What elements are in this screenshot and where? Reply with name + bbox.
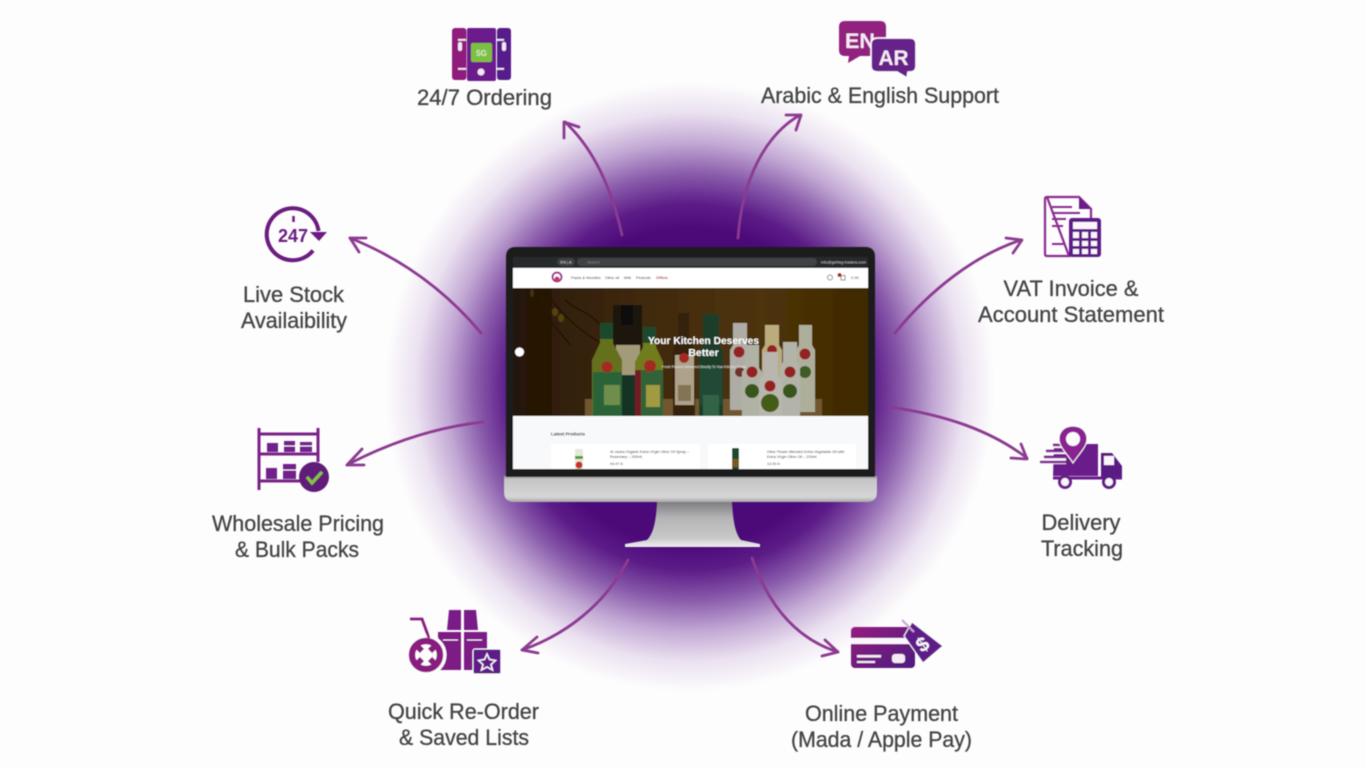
icon: delivery truck: [1040, 426, 1122, 488]
icon: language bubbles: AR: [878, 47, 908, 70]
icon: invoice and calculator: [1045, 197, 1101, 257]
feature: quick re-order: & Saved Lists: [399, 725, 529, 750]
icon: cart, boxes and star: [410, 610, 501, 674]
latest products: Olive Flower Blended Extra Vegetable Oil with: [767, 450, 844, 454]
arrow: to Arabic and English support: [738, 115, 801, 238]
site nav: Milk: [624, 275, 631, 280]
label: 24/7 Ordering: [417, 85, 552, 110]
browser top bar: [513, 257, 868, 268]
feature: wholesale pricing: [212, 428, 384, 562]
carousel dot: [515, 348, 524, 356]
latest products: 43.47 A: [610, 462, 623, 466]
site nav: Pasta & Noodles: [571, 275, 601, 280]
latest products: Latest Products: [551, 432, 586, 436]
monitor chin: [504, 476, 877, 502]
label: Live Stock: [243, 282, 345, 307]
arrow: to wholesale pricing: [347, 422, 483, 465]
hero headline: Fresh Flavors Delivered Directly To Your Kitchen Today: [662, 364, 746, 369]
icon: card and price tag: [851, 620, 943, 668]
latest products: Rosemary – 200ml: [610, 455, 642, 459]
arrow: to live stock: [350, 238, 481, 333]
site nav: 0.00: [851, 275, 860, 280]
icon: language bubbles: [839, 21, 916, 78]
feature: Arabic and English support: [761, 21, 999, 108]
site nav: Olive oil: [605, 275, 619, 280]
screen: [513, 268, 868, 474]
monitor: [504, 247, 877, 547]
latest products: Al Jazira Organic Extra Virgin Olive Oil Spray –: [610, 450, 690, 454]
arrow: to online payment: [752, 558, 838, 656]
feature: live stock: [241, 208, 347, 333]
label: Delivery: [1042, 510, 1120, 535]
feature: VAT invoice: Account Statement: [978, 302, 1164, 327]
site nav: [552, 272, 860, 282]
feature: VAT invoice: [978, 197, 1164, 327]
hero dim overlay: [513, 288, 868, 416]
hero headline: Your Kitchen Deserves: [648, 335, 759, 347]
site nav: Offers: [656, 275, 669, 280]
hero headline: Better: [688, 347, 719, 359]
feature: online payment: [791, 620, 972, 752]
latest products: 13.40 A: [767, 462, 780, 466]
label: Online Payment: [805, 701, 958, 726]
site nav: Peanuts: [636, 275, 651, 280]
arrow: to VAT invoice: [895, 238, 1022, 333]
hero banner: [513, 288, 868, 416]
monitor bezel: [506, 247, 875, 477]
hero headline: [648, 335, 759, 369]
arrow: to quick re-order: [522, 560, 628, 653]
icon: phones: 5G: [476, 49, 487, 58]
feature: delivery tracking: [1040, 426, 1123, 561]
icon: card and price tag: $: [912, 633, 934, 657]
product bottles: [592, 305, 815, 416]
feature: delivery tracking: Tracking: [1041, 536, 1123, 561]
label: VAT Invoice &: [1004, 276, 1139, 301]
arrow: to delivery tracking: [890, 407, 1027, 459]
label: Arabic & English Support: [761, 83, 999, 108]
browser top bar: Search: [587, 260, 600, 264]
browser top bar: EN | A: [560, 260, 572, 264]
label: Wholesale Pricing: [212, 511, 384, 536]
feature: quick re-order: [388, 610, 539, 750]
monitor stand: [625, 502, 760, 547]
latest products: Extra Virgin Olive Oil – 220ml: [767, 455, 817, 459]
icon: 247 clock: 247: [278, 226, 308, 246]
feature: online payment: (Mada / Apple Pay): [791, 727, 972, 752]
feature: wholesale pricing: & Bulk Packs: [235, 537, 359, 562]
label: Quick Re-Order: [388, 699, 539, 724]
icon: stocked shelves: [259, 428, 329, 492]
browser top bar: info@gethsg-traders.com: [821, 260, 867, 264]
icon: language bubbles: EN: [845, 30, 875, 53]
latest products: [550, 431, 845, 470]
feature: 24/7 ordering: [417, 28, 552, 110]
wooden table: [585, 399, 822, 416]
feature: live stock: Availaibility: [241, 308, 347, 333]
arrow: to 24/7 ordering: [564, 122, 622, 235]
